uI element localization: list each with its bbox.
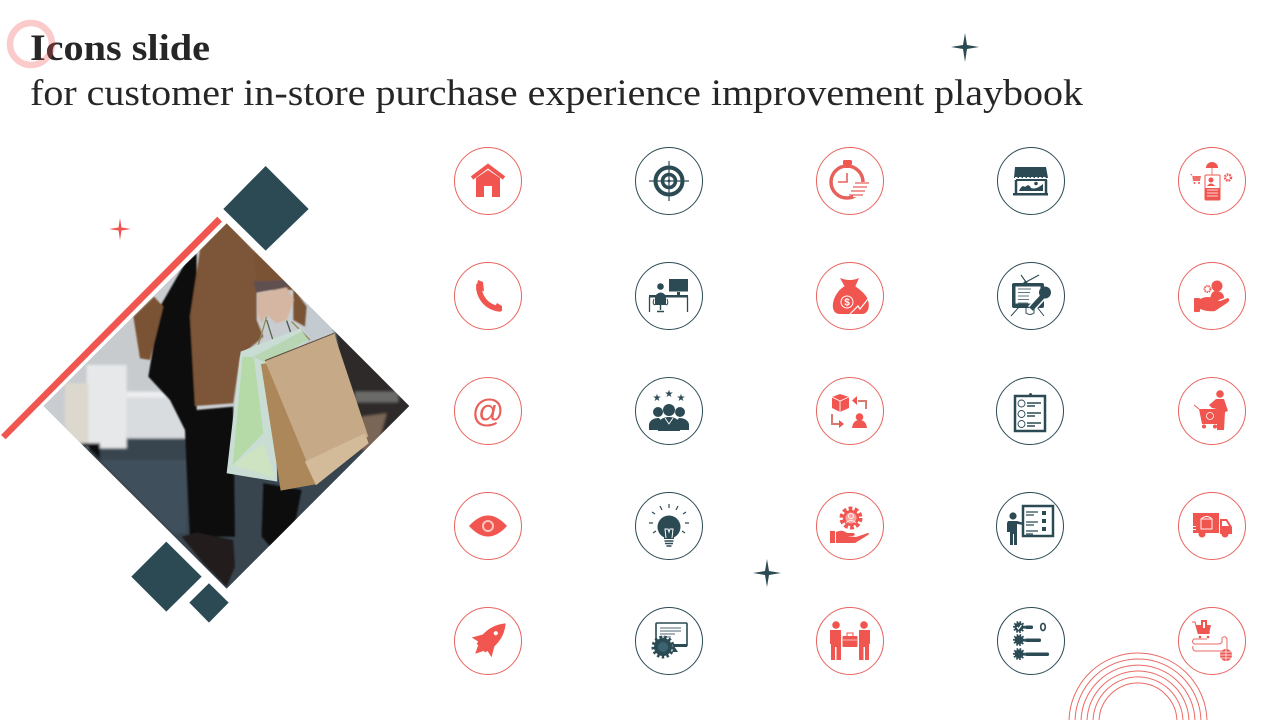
icon: rated team: ★	[665, 389, 674, 400]
title: for customer in-store purchase experience improvement playbook	[30, 73, 1084, 114]
decorative ring behind title	[10, 23, 52, 65]
icon: checklist clipboard	[996, 378, 1064, 444]
icon: at sign: @	[472, 393, 504, 429]
icon: settings checklist	[998, 608, 1064, 674]
photo panel with accents	[1, 166, 417, 623]
icon: presenter at board	[996, 492, 1064, 560]
icon: at sign	[454, 378, 522, 444]
icon: rated team	[636, 378, 702, 444]
photo: green bag	[227, 328, 308, 482]
icon: certificate with gear	[636, 608, 702, 674]
photo: kraft bag	[261, 333, 369, 491]
icon: light bulb	[636, 492, 702, 560]
accent: dark square bottom	[131, 542, 202, 612]
icon: storefront	[998, 148, 1064, 214]
icon: rated team: ★	[677, 393, 686, 404]
title: Icons slide	[30, 28, 210, 69]
icon: hand holding customer	[1178, 262, 1246, 330]
star: dark top	[951, 33, 979, 62]
icon: stopwatch	[816, 148, 884, 214]
icon: rocket	[454, 608, 522, 674]
icon: person at desk	[636, 262, 702, 330]
icon: phone	[454, 262, 522, 330]
accent: dark square small	[189, 583, 229, 623]
accent: dark square top	[223, 166, 309, 251]
icon: product return flow	[816, 378, 884, 444]
icon: partners with briefcase	[816, 608, 884, 674]
icon: money bag	[816, 262, 884, 330]
icon: shopper with cart	[1178, 378, 1246, 444]
icon: global cart shipping	[1178, 608, 1246, 674]
icon: home	[454, 148, 522, 214]
icon: delivery truck	[1178, 492, 1246, 560]
star: red	[109, 218, 131, 240]
title	[30, 28, 1084, 114]
photo: shopper with bags	[33, 217, 417, 593]
icon: customer profile network	[1178, 148, 1246, 214]
icon: hand with gear	[816, 492, 884, 560]
decorative concentric arcs	[1069, 653, 1207, 720]
icon: money bag: $	[844, 298, 850, 308]
icon: tv with microphone	[998, 262, 1064, 330]
star: dark middle	[753, 559, 781, 587]
accent: red diagonal bar	[1, 217, 222, 439]
icon: target	[636, 148, 702, 214]
icon: rated team: ★	[653, 393, 662, 404]
icon: eye	[454, 492, 522, 560]
